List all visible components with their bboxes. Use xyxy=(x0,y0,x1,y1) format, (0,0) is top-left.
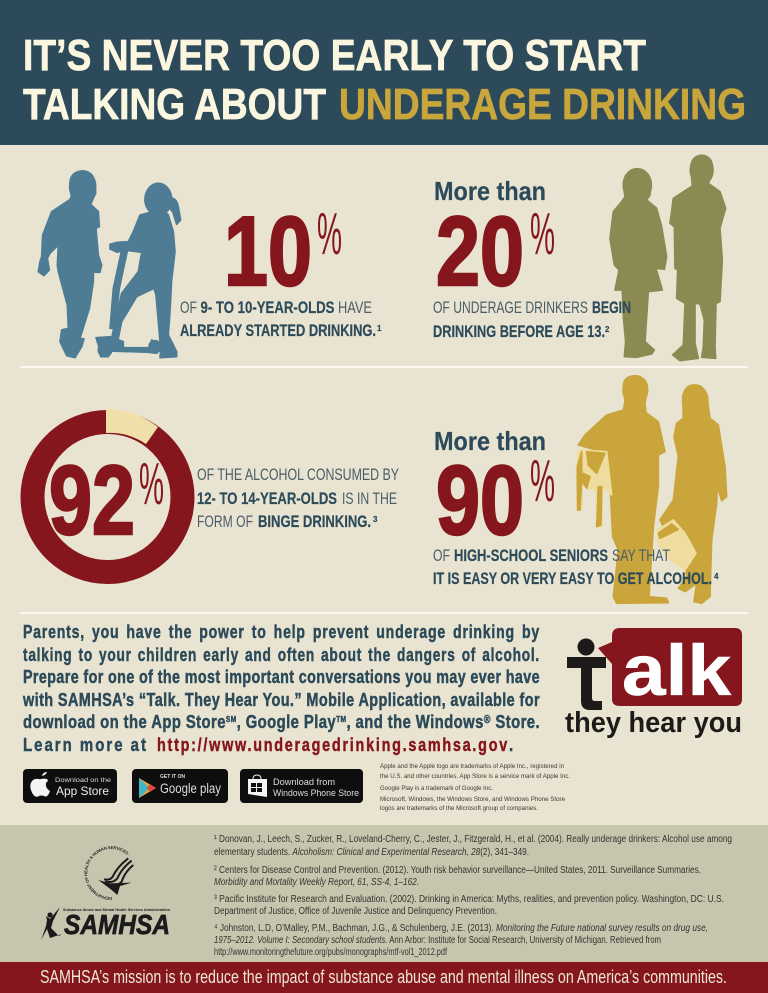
call to action paragraph: . xyxy=(509,735,514,755)
title banner xyxy=(0,0,768,145)
badge: google play: GET IT ON xyxy=(160,774,185,780)
stat text: 92 percent: OF THE ALCOHOL CONSUMED BY xyxy=(197,465,399,484)
call to action paragraph: TM xyxy=(336,715,346,724)
stat: 10 percent: HAVE xyxy=(338,298,372,317)
call to action paragraph: Prepare for one of the most important conversations you may ever have xyxy=(23,667,540,687)
stat text: 92 percent: 12- TO 14-YEAR-OLDS xyxy=(197,489,337,508)
logo: SAMHSA xyxy=(41,907,171,940)
reference 4 xyxy=(214,923,708,958)
reference 4: 1975–2012. Volume I: Secondary school students. Ann Arbor: Institute for Social Research, University of Michigan. Retrieved from xyxy=(214,935,661,946)
stat: more than 90 percent: HIGH-SCHOOL SENIORS xyxy=(454,546,608,565)
logo: HHS seal xyxy=(84,846,134,900)
silhouette: girl and boy standing xyxy=(610,155,726,361)
logo: talk they hear you xyxy=(565,628,742,739)
badge: app store: App Store xyxy=(56,784,109,798)
stat: more than 90 percent: SAY THAT xyxy=(612,546,670,565)
references xyxy=(214,834,732,958)
call to action paragraph: ® xyxy=(484,714,491,726)
trademark notices xyxy=(380,763,570,812)
title banner: TALKING ABOUT xyxy=(23,80,326,129)
stat: 10 percent: 10 xyxy=(224,196,312,306)
stat: more than 90 percent: OF xyxy=(433,546,450,565)
title banner: IT’S NEVER TOO EARLY TO START xyxy=(23,31,646,80)
call to action paragraph: download on the App Store xyxy=(23,712,269,732)
reference 1 xyxy=(214,834,732,858)
reference 3: Department of Justice, Office of Juvenile Justice and Delinquency Prevention. xyxy=(214,906,497,917)
call to action paragraph xyxy=(22,622,540,755)
silhouette: boy and girl with scooter xyxy=(38,171,181,358)
stat: more than 20 percent: BEGIN xyxy=(592,298,631,317)
call to action paragraph: Learn more at xyxy=(23,735,148,755)
footer panel xyxy=(0,825,768,962)
stat text: 92 percent: 3 xyxy=(373,515,378,524)
reference 3 xyxy=(214,894,724,917)
logo: HHS seal: DEPARTMENT OF HEALTH & HUMAN SERVICES · USA xyxy=(84,846,130,900)
stat: more than 90 percent: 4 xyxy=(714,572,719,581)
stat text: 92 percent: FORM OF xyxy=(197,512,253,531)
donut chart: 92 percent: % xyxy=(139,451,164,517)
donut chart: 92 percent xyxy=(32,409,182,572)
reference 4: ⁴ Johnston, L.D, O’Malley, P.M., Bachman, J.G., & Schulenberg, J.E. (2013). Monitoring the Future national survey results on drug use, xyxy=(214,923,708,934)
logo: SAMHSA: Substance Abuse and Mental Health Services Administration xyxy=(63,908,171,912)
call to action paragraph: http://www.underagedrinking.samhsa.gov xyxy=(157,735,509,755)
call to action paragraph: Parents, you have the power to help prevent underage drinking by xyxy=(23,622,540,642)
stat: more than 20 percent: 20 xyxy=(436,196,524,306)
badge: windows phone store xyxy=(240,769,363,803)
badge: google play: Google play xyxy=(160,781,221,796)
stat: 10 percent: 9- TO 10-YEAR-OLDS xyxy=(200,298,334,317)
reference 2: Morbidity and Mortality Weekly Report, 61, SS-4, 1–162. xyxy=(214,877,419,888)
call to action paragraph: talking to your children early and often about the dangers of alcohol. xyxy=(23,645,540,665)
stat: more than 90 percent: More than xyxy=(434,426,546,456)
stat: more than 90 percent xyxy=(433,426,719,588)
stat: more than 20 percent: DRINKING BEFORE AGE 13. xyxy=(433,322,605,341)
stat text: 92 percent: BINGE DRINKING. xyxy=(258,512,371,531)
stat: more than 20 percent xyxy=(433,176,631,341)
reference 2 xyxy=(214,865,701,888)
trademark notices: the U.S. and other countries. App Store is a service mark of Apple Inc. xyxy=(380,773,570,780)
trademark notices: logos are trademarks of the Microsoft group of companies. xyxy=(380,805,538,812)
stat: more than 20 percent: OF UNDERAGE DRINKERS xyxy=(433,298,588,317)
call to action paragraph: , Google Play xyxy=(237,712,336,732)
logo: talk they hear you: they hear you xyxy=(565,707,742,739)
stat: more than 20 percent: 2 xyxy=(605,325,610,334)
call to action paragraph: , and the Windows xyxy=(346,712,484,732)
badge: windows phone store: Windows Phone Store xyxy=(273,788,359,798)
badge: app store: Download on the xyxy=(55,777,111,784)
stat: more than 20 percent: % xyxy=(530,201,555,267)
stat: 10 percent: ALREADY STARTED DRINKING. xyxy=(180,321,376,340)
silhouette: teen couple xyxy=(577,376,727,603)
trademark notices: Google Play is a trademark of Google Inc. xyxy=(380,785,493,792)
stat: more than 20 percent: More than xyxy=(434,176,546,206)
trademark notices: Apple and the Apple logo are trademarks of Apple Inc., registered in xyxy=(380,763,564,770)
stat: 10 percent: % xyxy=(317,201,342,267)
call to action paragraph: SM xyxy=(226,715,237,724)
mission statement band xyxy=(0,962,768,993)
logo: SAMHSA: SAMHSA xyxy=(64,909,170,940)
stat: more than 90 percent: 90 xyxy=(436,445,524,555)
stat: 10 percent: OF xyxy=(180,298,197,317)
donut chart: 92 percent: 92 xyxy=(49,445,135,555)
reference 1: elementary students. Alcoholism: Clinical and Experimental Research, 28(2), 341–349. xyxy=(214,847,529,858)
stat text: 92 percent: IS IN THE xyxy=(342,489,397,508)
trademark notices: Microsoft, Windows, the Windows Store, and Windows Phone Store xyxy=(380,796,565,803)
reference 4: http://www.monitoringthefuture.org/pubs/monographs/mtf-vol1_2012.pdf xyxy=(214,947,447,958)
badge: app store xyxy=(23,769,117,803)
stat: 10 percent: 1 xyxy=(377,324,382,333)
stat text: 92 percent xyxy=(197,465,399,531)
logo: talk they hear you: alk xyxy=(622,632,732,711)
badge: google play xyxy=(132,769,228,803)
badge: windows phone store: Download from xyxy=(273,777,335,787)
call to action paragraph: with SAMHSA’s “Talk. They Hear You.” Mobile Application, available for xyxy=(22,690,540,710)
stat: 10 percent xyxy=(180,196,382,340)
call to action paragraph: Store. xyxy=(491,712,540,732)
stat: more than 90 percent: % xyxy=(530,448,555,514)
